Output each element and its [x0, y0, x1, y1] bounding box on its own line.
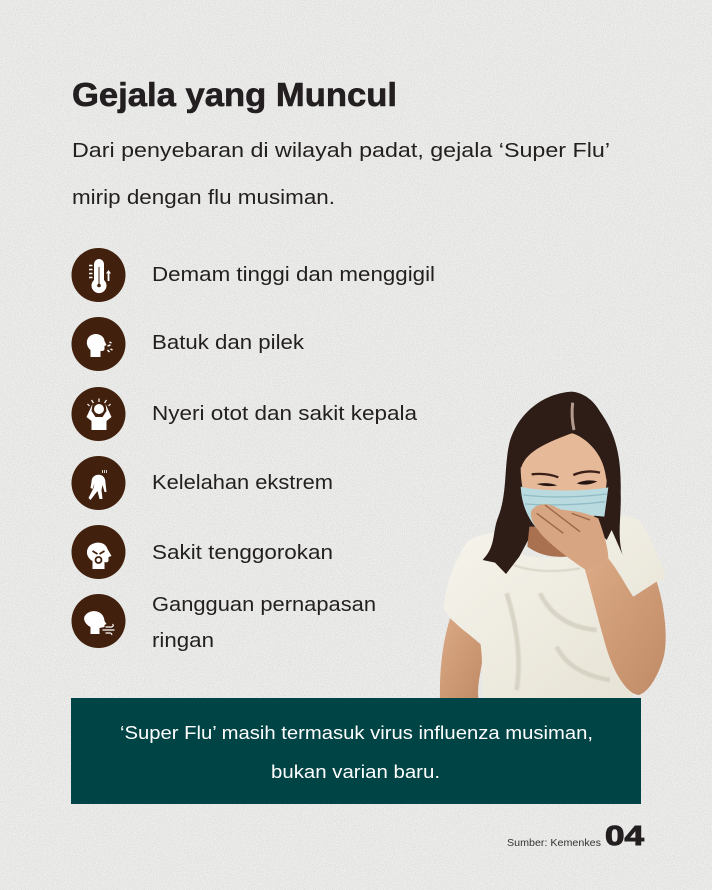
symptom: breathing — [72, 594, 376, 652]
symptom: cough — [72, 317, 305, 371]
label: Gangguan pernapasan — [152, 594, 376, 616]
callout banner — [71, 698, 641, 804]
label: ringan — [152, 630, 214, 652]
label: Nyeri otot dan sakit kepala — [152, 403, 418, 425]
icon: throat head — [72, 525, 126, 579]
icon: coughing head — [72, 317, 126, 371]
label — [152, 594, 376, 652]
symptom list — [72, 248, 435, 652]
hand — [531, 504, 608, 571]
photo: woman with mask coughing — [440, 392, 666, 698]
page number: 04 — [605, 820, 645, 851]
symptom: fatigue — [72, 456, 333, 510]
icon: breathing head — [72, 594, 126, 648]
eyes and brows — [532, 471, 600, 477]
label: Kelelahan ekstrem — [152, 472, 333, 494]
label: Sakit tenggorokan — [152, 542, 333, 564]
title: Gejala yang Muncul — [72, 76, 397, 113]
callout text: ‘Super Flu’ masih termasuk virus influenza musiman, — [120, 723, 593, 743]
callout text — [120, 723, 593, 782]
face — [521, 433, 607, 523]
neck — [527, 527, 573, 557]
label: Demam tinggi dan menggigil — [152, 264, 435, 286]
mask — [521, 487, 608, 528]
source: Sumber: Kemenkes — [507, 837, 601, 849]
callout text: bukan varian baru. — [271, 762, 440, 782]
intro text: mirip dengan flu musiman. — [72, 186, 335, 209]
fringe — [517, 400, 573, 467]
label: Batuk dan pilek — [152, 332, 305, 354]
shirt folds — [507, 565, 610, 690]
icon: headache figure — [72, 387, 126, 441]
shirt — [443, 517, 666, 698]
intro text: Dari penyebaran di wilayah padat, gejala ‘Super Flu’ — [72, 139, 610, 162]
symptom: fever — [72, 248, 435, 302]
hair part — [572, 403, 574, 430]
intro text — [72, 139, 610, 209]
icon: tired figure — [72, 456, 126, 510]
icon: thermometer — [72, 248, 126, 302]
hair — [483, 392, 623, 574]
symptom: sore throat — [72, 525, 333, 579]
left arm — [440, 618, 483, 698]
right arm — [585, 558, 666, 695]
symptom: headache — [72, 387, 418, 441]
